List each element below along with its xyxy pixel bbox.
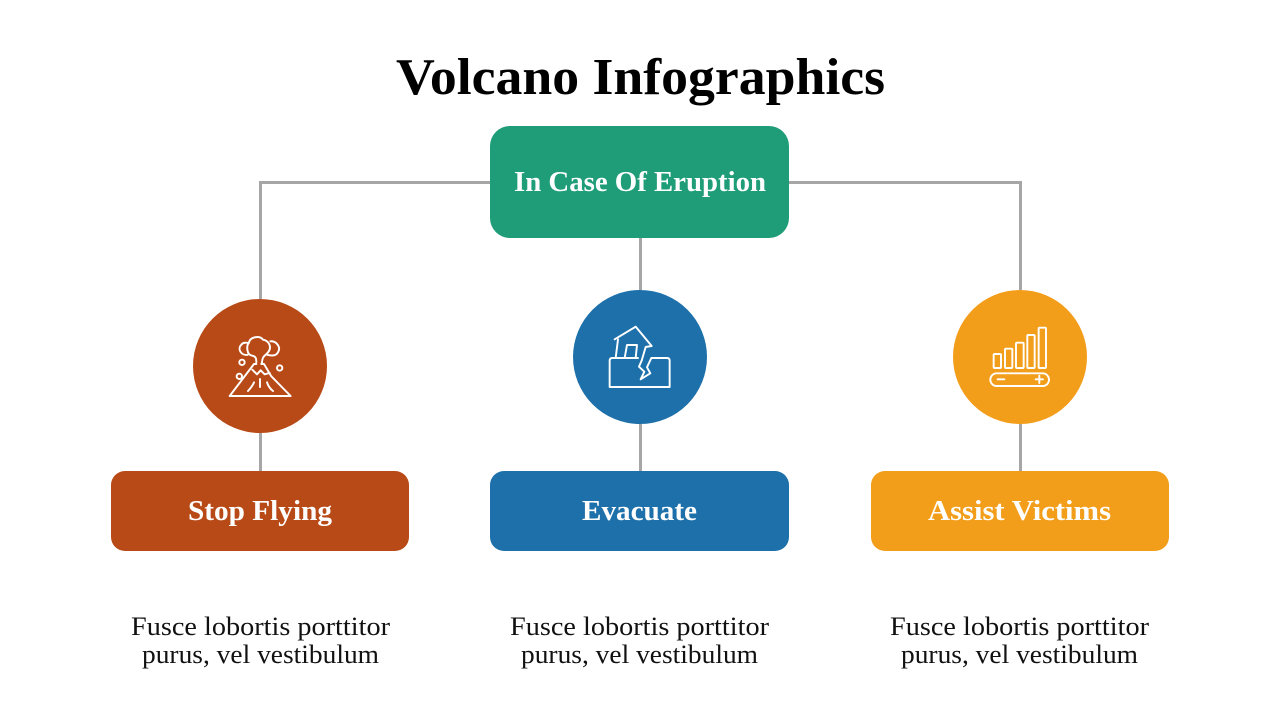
description: Evacuate: Fusce lobortis porttitor — [510, 612, 769, 641]
connector lines — [260, 182, 1020, 471]
label box: Assist Victims: Assist Victims — [928, 495, 1111, 527]
description: Assist Victims: Fusce lobortis porttitor — [890, 612, 1149, 641]
column: Evacuate — [490, 290, 789, 669]
title: Volcano Infographics — [396, 49, 885, 106]
description: Evacuate — [510, 612, 769, 669]
label box: Stop Flying — [111, 471, 409, 551]
label box: Evacuate: Evacuate — [582, 495, 697, 527]
description: Assist Victims: purus, vel vestibulum — [901, 640, 1138, 669]
column: Assist Victims — [871, 290, 1169, 669]
icon: signal bars with slider — [953, 290, 1087, 424]
label box: Evacuate — [490, 471, 789, 551]
label box: Assist Victims — [871, 471, 1169, 551]
description: Assist Victims — [890, 612, 1149, 669]
icon: volcano — [193, 299, 327, 433]
icon: cracked house — [573, 290, 707, 424]
top box: In Case Of Eruption: In Case Of Eruption — [514, 166, 766, 198]
column: Stop Flying — [111, 299, 409, 669]
top box: In Case Of Eruption — [490, 126, 789, 238]
description: Stop Flying: Fusce lobortis porttitor — [131, 612, 390, 641]
description: Stop Flying — [131, 612, 390, 669]
label box: Stop Flying: Stop Flying — [188, 495, 333, 527]
description: Evacuate: purus, vel vestibulum — [521, 640, 758, 669]
description: Stop Flying: purus, vel vestibulum — [142, 640, 379, 669]
